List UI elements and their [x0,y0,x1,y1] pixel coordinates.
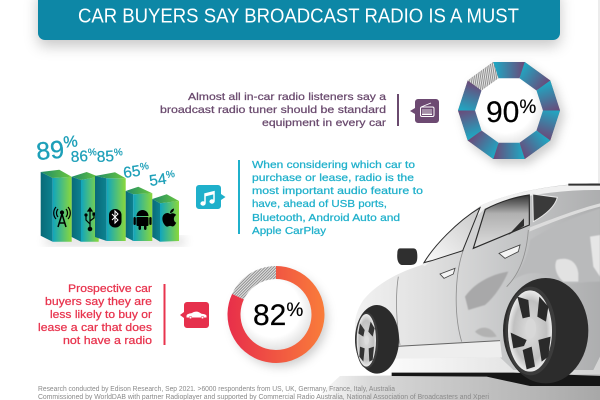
text: tuner statement: broadcast radio tuner should be standard [160,104,386,116]
rear quarter shading [513,208,600,287]
value: 90%: % [519,97,536,118]
chart: 3D bars of audio features [35,133,185,246]
value: 65%: % [139,161,150,173]
text: audio feature statement: Bluetooth, Android Auto and [252,212,400,224]
text: prospective buyers statement: less likely to buy or [50,309,152,321]
door handles [440,268,455,278]
quarter window [533,194,557,222]
value: 86%: 86 [70,148,88,166]
text: tuner statement: equipment in every car [262,117,387,129]
value: 85%: 85 [96,148,114,166]
bar: Apple 54% [152,194,179,242]
rear wheel [503,278,588,383]
value: 82%: % [286,300,303,321]
rear door window [473,195,529,248]
chart: 82 percent donut [229,268,323,362]
icon: radio [410,99,439,123]
title banner [38,0,560,40]
front window [424,208,480,263]
chart: 90 percent decagon ring [458,62,560,159]
bar: radio 89% [41,170,72,242]
panel: 90 percent radio tuner standard [160,62,560,159]
text: audio feature statement: Apple CarPlay [252,225,327,237]
text: tuner statement [160,91,387,129]
icon: Android [134,210,152,230]
text: prospective buyers statement [38,283,153,347]
icon: USB [85,208,95,231]
door lines [397,230,528,345]
text: prospective buyers statement: lease a car that does [38,322,153,334]
text: prospective buyers statement: Prospective car [68,283,152,295]
title: CAR BUYERS SAY BROADCAST RADIO IS A MUST [78,6,519,28]
text: audio feature statement: have, ahead of USB ports, [252,198,387,210]
value: 86%: % [88,147,97,159]
ground shadow [313,373,600,400]
bars shadow [45,236,185,246]
text: audio feature statement [252,159,423,237]
text: tuner statement: Almost all in-car radio listeners say a [188,91,386,103]
icon: Apple [162,208,176,227]
divider bar [397,94,399,126]
icon: car [180,302,209,328]
value: 85%: % [114,147,123,159]
under-car shade [390,357,600,375]
icon: music note [196,185,226,209]
mirror [397,248,417,265]
text: audio feature statement: When considering which car to [252,159,415,171]
window slash [508,218,524,235]
panel: radio most important audio feature [196,159,423,237]
value: 82%: 82 [253,299,286,332]
door shading [465,272,508,310]
divider bar [164,284,166,345]
icon: antenna [54,207,70,227]
text: prospective buyers statement: not have a radio [63,335,152,347]
illustration: silver car [313,183,600,400]
front wheel [355,305,399,374]
icon: Bluetooth [109,209,122,228]
bar: Bluetooth 85% [95,172,126,241]
bar: USB 86% [72,172,99,242]
value: 54%: % [165,169,176,181]
value: 65%: 65 [122,163,142,182]
value: 54%: 54 [148,171,168,190]
roof highlight [422,184,600,266]
body [355,183,600,370]
text: prospective buyers statement: buyers say they are [45,296,152,308]
footer: source notes: Research conducted by Edison Research, Sep 2021. >6000 respondents from US, UK, Germany, France, Italy, Australia [38,384,396,393]
bar: Android 65% [126,187,152,241]
text: audio feature statement: most important audio feature to [252,185,423,197]
page edge strip [598,0,600,400]
value: 89%: % [63,133,78,152]
panel: 82 percent less likely to buy [38,268,323,362]
footer: source notes [38,384,489,400]
lower sill [391,340,502,358]
value: 90%: 90 [486,96,519,129]
text: audio feature statement: purchase or lease, radio is the [252,172,414,184]
divider bar [238,160,240,234]
value: 89%: 89 [35,136,65,166]
